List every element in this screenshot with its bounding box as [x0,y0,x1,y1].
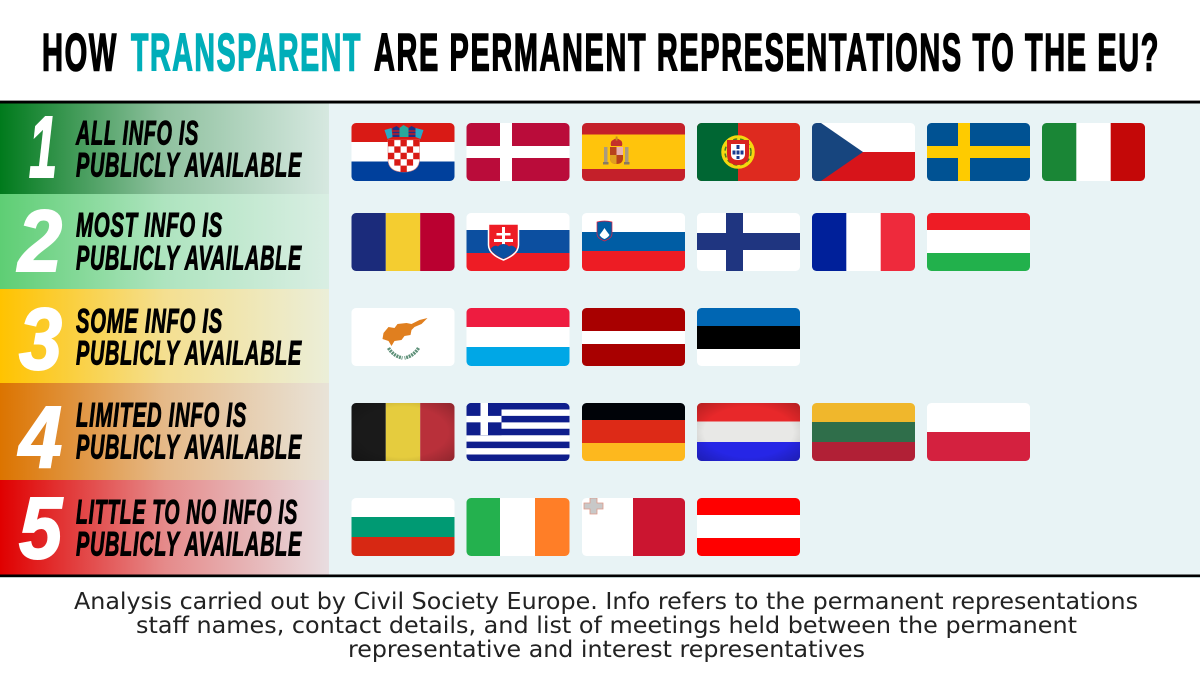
flag: Italy [1042,123,1145,181]
footnote text block: staff names, contact details, and list of meetings held between the permanent [136,613,1077,639]
flag: Bulgaria [352,498,454,556]
flag: Slovenia [582,213,685,271]
flag: Greece [466,403,570,461]
flag: Portugal [697,123,800,181]
flag: Latvia [582,308,685,366]
panel: tier 5 label: LITTLE TO NO INFO IS [76,494,298,532]
panel: tier 2 label: 2 [16,193,62,290]
footnote text block [74,589,1138,663]
panel: tier 3 label [0,289,329,388]
panel: tier 1 label: ALL INFO IS [75,114,199,152]
flag: Estonia [697,308,800,366]
title: HOW [42,24,118,82]
flag: Ireland [466,498,570,556]
panel: tier 2 label [0,193,329,290]
flag: Malta [582,498,685,556]
panel: tier 3 label: SOME INFO IS [76,302,223,340]
flag: Lithuania [812,403,915,461]
flag: Sweden [927,123,1030,181]
flag: Austria [697,498,800,556]
panel: tier 5 label: 5 [19,480,63,577]
flag: Slovakia [466,213,570,271]
panel: tier 4 label: PUBLICLY AVAILABLE [76,428,302,466]
footnote text block: Analysis carried out by Civil Society Europe. Info refers to the permanent representations [74,589,1138,615]
panel: tier 1 label: 1 [29,99,57,196]
panel: tier 4 label [0,383,329,486]
panel: tier 4 label: LIMITED INFO IS [76,396,247,434]
title: TRANSPARENT [131,24,362,82]
title [42,24,1160,82]
panel: tier 2 label: MOST INFO IS [76,206,223,244]
panel: tier 3 label: 3 [19,291,62,388]
flag: Netherlands [697,403,800,461]
flag: Spain [582,123,685,181]
panel: tier 5 label: PUBLICLY AVAILABLE [76,526,302,564]
flag: Cyprus [352,308,454,366]
flag: Romania [352,213,454,271]
flag: Belgium [352,403,454,461]
flag: Czechia [812,123,915,181]
panel: tier 2 label: PUBLICLY AVAILABLE [76,240,302,278]
flag: Denmark [466,123,570,181]
flag: Poland [927,403,1030,461]
panel: tier 1 label [0,99,329,196]
footnote text block: representative and interest representatives [348,637,865,663]
panel: tier 3 label: PUBLICLY AVAILABLE [76,334,302,372]
flag: Finland [697,213,800,271]
flag: Germany [582,403,685,461]
panel: tier 5 label [0,480,329,577]
flag panel background [329,103,1200,575]
panel: tier 1 label: PUBLICLY AVAILABLE [76,146,302,184]
panel: tier 4 label: 4 [17,389,62,486]
flag: France [812,213,915,271]
flag: Hungary [927,213,1030,271]
flag: Luxembourg [466,308,570,366]
flag: Croatia [352,123,454,181]
